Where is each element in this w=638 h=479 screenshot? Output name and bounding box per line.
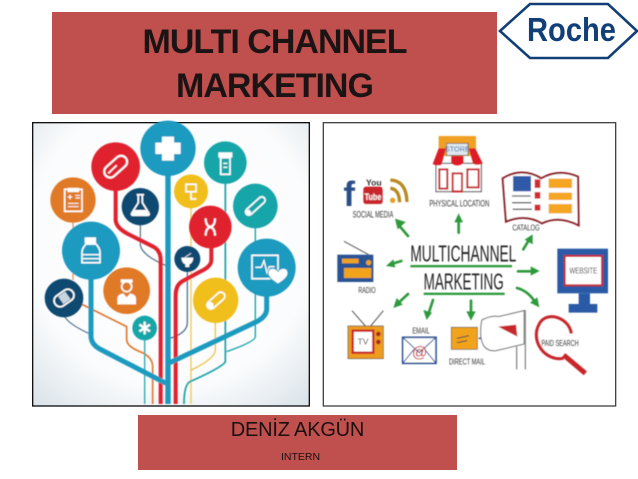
icon: television bbox=[348, 311, 383, 359]
icon: email bbox=[403, 325, 436, 363]
central heading: MARKETING bbox=[424, 269, 504, 295]
green arrows bbox=[386, 213, 540, 321]
icon: website monitor bbox=[557, 249, 608, 313]
icon: dropper bbox=[174, 174, 208, 208]
title text: MULTI CHANNEL bbox=[142, 23, 406, 61]
icon: medicine bottle teal bbox=[204, 141, 247, 184]
title text bbox=[142, 23, 406, 105]
icon: large bottle bbox=[62, 222, 120, 280]
icon: paid search bbox=[536, 317, 585, 373]
central heading bbox=[410, 241, 516, 295]
icon: test tube bbox=[193, 278, 238, 323]
icon: direct mail bbox=[449, 310, 525, 369]
icon: catalog book bbox=[503, 172, 579, 233]
icon: email: @ bbox=[412, 344, 427, 361]
icon: asterisk bbox=[132, 316, 157, 340]
icon: catalog book: CATALOG bbox=[512, 223, 540, 233]
icon: direct mail: DIRECT MAIL bbox=[449, 357, 485, 367]
icon: nurse bbox=[103, 267, 150, 314]
icon: social media bbox=[343, 175, 407, 219]
icon: social media: SOCIAL MEDIA bbox=[353, 209, 393, 219]
icon: flask bbox=[122, 188, 159, 225]
icon: bandage bbox=[45, 279, 83, 317]
icon: store: PHYSICAL LOCATION bbox=[429, 198, 489, 208]
icon: Roche logo bbox=[498, 2, 638, 60]
presenter role: INTERN bbox=[281, 451, 320, 463]
icon: social media: Tube bbox=[365, 192, 381, 202]
icon: thermometer bbox=[233, 184, 278, 228]
icon: social media: You bbox=[366, 178, 382, 188]
icon: clipboard bbox=[50, 177, 96, 223]
presenter name: DENİZ AKGÜN bbox=[231, 419, 364, 441]
icon: store bbox=[429, 136, 489, 208]
icon: paid search: PAID SEARCH bbox=[541, 338, 579, 348]
icon: radio: RADIO bbox=[358, 285, 376, 295]
tree branches bbox=[64, 173, 267, 404]
icon: website monitor: WEBSITE bbox=[569, 266, 598, 276]
icon: Roche logo: Roche bbox=[527, 11, 616, 48]
icon: email: EMAIL bbox=[412, 325, 430, 335]
icon: medical cross bbox=[140, 121, 196, 176]
icon: television: TV bbox=[357, 337, 369, 347]
icon: radio bbox=[337, 241, 376, 295]
presenter banner bbox=[138, 415, 457, 470]
icon: social media: f bbox=[343, 175, 355, 214]
icon: store: STORE bbox=[445, 145, 470, 154]
icon: heart monitor bbox=[238, 239, 296, 297]
icon: DNA bbox=[189, 206, 232, 248]
icon: pill bbox=[91, 142, 140, 191]
icon: mortar bbox=[174, 246, 200, 272]
title text: MARKETING bbox=[176, 67, 373, 105]
central heading: MULTICHANNEL bbox=[410, 241, 516, 267]
title banner bbox=[52, 12, 497, 114]
